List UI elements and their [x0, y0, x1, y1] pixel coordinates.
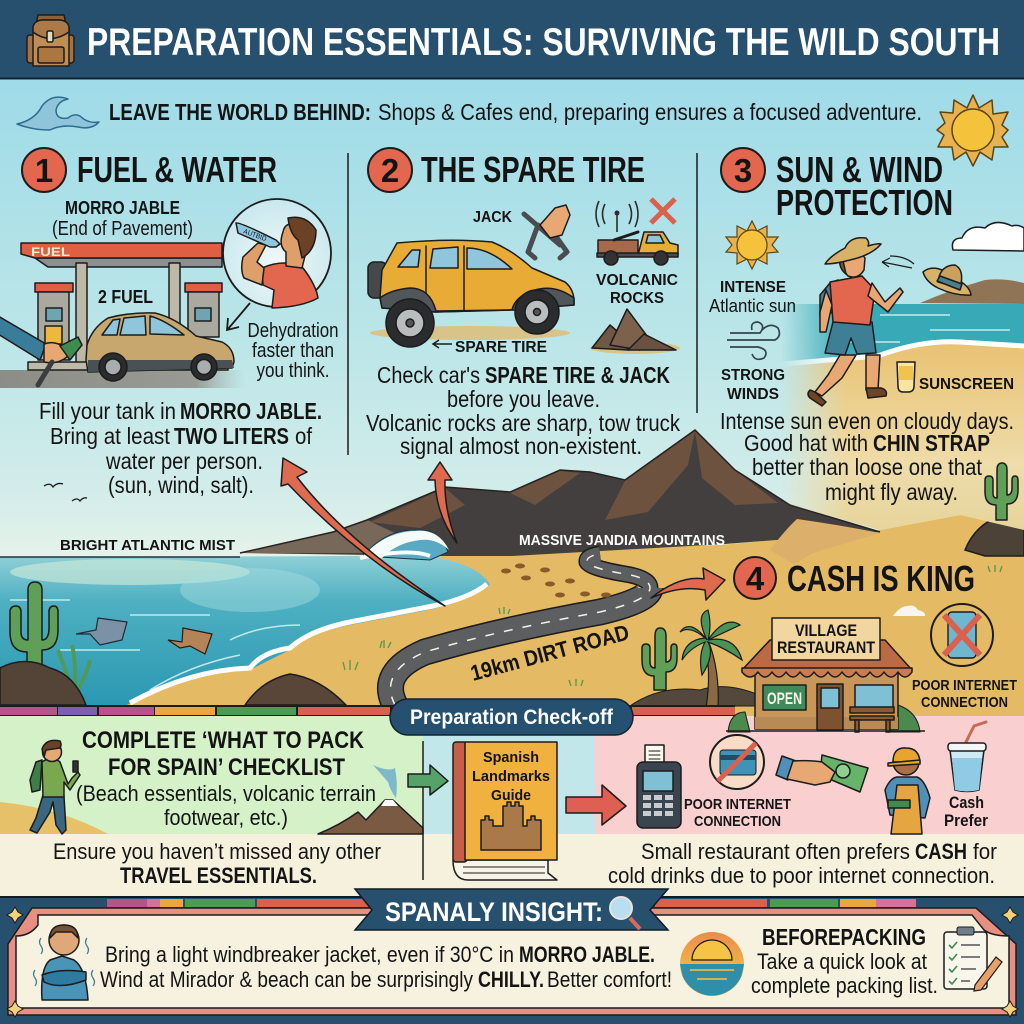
- intro text: Shops & Cafes end, preparing ensures a focused adventure.: [378, 99, 922, 125]
- checklist text: FOR SPAIN’ CHECKLIST: [108, 754, 345, 781]
- panel: 3 sun and wind protection: [700, 148, 1024, 530]
- before packing text: Take a quick look at: [757, 949, 927, 974]
- icon: small sun: [726, 221, 778, 269]
- heading 2: [368, 148, 645, 192]
- intro banner: [17, 97, 922, 130]
- intro text: LEAVE THE WORLD BEHIND:: [109, 99, 371, 125]
- body text 2: Volcanic rocks are sharp, tow truck: [366, 410, 680, 436]
- heading 1: 1: [35, 152, 53, 189]
- icon: wind: [727, 322, 779, 359]
- restaurant sign: [772, 618, 880, 660]
- salmon frame: [8, 908, 1016, 1015]
- horizon line: [0, 556, 240, 558]
- header bar: [0, 0, 1024, 80]
- heading 1: FUEL & WATER: [77, 149, 277, 190]
- poor internet label bottom: POOR INTERNET: [684, 796, 791, 813]
- morro jable label: (End of Pavement): [52, 218, 193, 240]
- sand ground: [0, 495, 1024, 720]
- flying hat: [923, 265, 971, 295]
- icon: no signal: [596, 199, 675, 232]
- heading 4: [734, 557, 975, 599]
- body text 1: Bring at least: [50, 423, 171, 449]
- shiver lines: [34, 938, 94, 986]
- before packing text: BEFOREPACKING: [762, 924, 926, 950]
- body text 1: TWO LITERS: [174, 423, 289, 449]
- intense sun label: [709, 279, 796, 316]
- palm tree: [680, 610, 742, 708]
- arrow to cash heading: [651, 568, 725, 600]
- crashing wave: [360, 530, 449, 560]
- divider strip: [0, 705, 735, 717]
- body text 3: might fly away.: [825, 479, 958, 505]
- spare tire label: SPARE TIRE: [455, 339, 547, 356]
- heading 2: 2: [381, 152, 399, 189]
- body text 1: MORRO JABLE.: [180, 398, 322, 424]
- sunscreen: [897, 362, 1014, 393]
- icon: cold drink: [948, 722, 986, 792]
- shore rock left: [0, 662, 86, 705]
- spanish landmarks guide book: Guide: [491, 787, 531, 804]
- icon: sunset over water: [680, 932, 744, 996]
- green arrow: [408, 765, 448, 795]
- green panel: [0, 716, 423, 834]
- icon: no internet phone: [931, 604, 993, 666]
- intro text: [109, 99, 922, 125]
- volcanic rocks label: ROCKS: [610, 290, 664, 307]
- panel: 4 cash is king: [651, 557, 975, 600]
- cash text: for: [973, 839, 997, 864]
- body text 2: Check car's: [377, 362, 480, 388]
- checklist band: [0, 716, 1024, 898]
- sun reflection and mist on the sea: [10, 559, 250, 585]
- spanish landmarks guide book: Spanish: [483, 749, 539, 766]
- gas station: 2 FUEL: [98, 287, 153, 307]
- body text 1: of: [295, 423, 313, 449]
- heading 3: PROTECTION: [776, 182, 953, 223]
- right rocks: [965, 516, 1024, 556]
- checklist text: [53, 727, 381, 888]
- checklist text: TRAVEL ESSENTIALS.: [120, 863, 317, 888]
- dark mound: [630, 687, 770, 706]
- sea ripples: [10, 600, 300, 690]
- cash text: [608, 839, 997, 888]
- manta ray grey: [76, 618, 127, 645]
- cactus roadside: [642, 628, 677, 690]
- spanish landmarks guide book: [453, 742, 557, 880]
- sand patch: [0, 802, 108, 834]
- strong winds label: [721, 367, 785, 403]
- volcanic rocks label: VOLCANIC: [596, 272, 678, 289]
- icon: tow truck: [597, 232, 678, 265]
- checklist text: footwear, etc.): [164, 805, 288, 830]
- beach scene background: [784, 304, 1024, 530]
- cash text: Small restaurant often prefers: [641, 839, 910, 864]
- poor internet label top: CONNECTION: [921, 694, 1008, 711]
- jandia mountains: [240, 430, 880, 556]
- dehydration note: [248, 320, 338, 382]
- intense sun label: INTENSE: [720, 279, 786, 296]
- atlantic sea: [0, 556, 490, 705]
- body text 3: [720, 408, 1014, 505]
- shoreline foam: [130, 584, 487, 703]
- poor internet label bottom: [684, 796, 791, 830]
- body text 1: water per person.: [105, 448, 263, 474]
- body text 2: signal almost non-existent.: [400, 433, 642, 459]
- icon: magnifier: [610, 897, 640, 929]
- mountains label: MASSIVE JANDIA MOUNTAINS: [519, 532, 725, 549]
- sky background: [0, 80, 1024, 560]
- icon: restaurant worker: [885, 748, 930, 834]
- grass tufts: [343, 565, 1002, 686]
- open sign: [763, 685, 806, 710]
- arrow to fuel panel: [281, 458, 445, 606]
- poor internet label top: [912, 677, 1017, 711]
- strong winds label: STRONG: [721, 367, 785, 384]
- hand holding nozzle: [0, 316, 82, 385]
- preparation check-off pill: [390, 699, 633, 735]
- preparation check-off pill: Preparation Check-off: [410, 706, 614, 729]
- panel: spanaly insight: [0, 889, 1024, 1024]
- sunscreen: SUNSCREEN: [919, 376, 1014, 393]
- colour strip: [107, 899, 916, 907]
- morro jable label: MORRO JABLE: [65, 198, 180, 218]
- icon: wave: [17, 97, 99, 130]
- before packing text: [751, 924, 938, 998]
- cash prefer label: Cash: [949, 793, 984, 812]
- manta ray brown: [168, 628, 212, 654]
- icon: volcanic rock pile: [590, 309, 680, 354]
- cream card: [16, 915, 1009, 1008]
- panel: 1 fuel and water: [0, 148, 338, 501]
- scene labels: [60, 532, 725, 686]
- cash text: CASH: [915, 839, 967, 864]
- red arrow: [566, 785, 626, 825]
- cloud: [952, 222, 1024, 251]
- checklist text: Ensure you haven’t missed any other: [53, 839, 381, 864]
- restaurant building: [726, 618, 925, 732]
- jack label: JACK: [473, 209, 512, 226]
- volcanic rocks label: [596, 272, 678, 307]
- body text 2: before you leave.: [447, 386, 600, 412]
- checklist text: COMPLETE ‘WHAT TO PACK: [82, 727, 365, 754]
- icon: big sun: [937, 95, 1008, 166]
- open sign: OPEN: [767, 689, 802, 708]
- cactus on shore: [10, 582, 58, 672]
- tan car: [86, 313, 234, 381]
- banner: [355, 889, 668, 930]
- door: [817, 684, 843, 730]
- cash prefer label: [944, 793, 988, 830]
- icon: person drinking water: [223, 199, 331, 308]
- dehydration note: Dehydration: [248, 320, 338, 342]
- heading 1: [22, 148, 277, 192]
- icon: chilly man: [42, 925, 88, 1000]
- far hill: [920, 279, 1024, 304]
- atlantic mist label: BRIGHT ATLANTIC MIST: [60, 537, 235, 554]
- seaweed plant: [55, 645, 90, 690]
- divider lines: [348, 153, 697, 455]
- icon: castle: [481, 802, 541, 850]
- winding dirt road: [390, 554, 650, 705]
- body text 1: (sun, wind, salt).: [108, 472, 254, 498]
- divider line check-off: [422, 741, 424, 880]
- dehydration arrow: [227, 303, 250, 330]
- before packing text: complete packing list.: [751, 973, 938, 998]
- icon: payment terminal: [637, 745, 681, 828]
- morro jable label: [52, 198, 193, 240]
- icon: volcano with smoke: [318, 765, 423, 834]
- dirt road label: 19km DIRT ROAD: [468, 619, 632, 686]
- panel: 2 spare tire: [366, 148, 680, 459]
- icon: jack with hand: [524, 205, 570, 258]
- icon: birds: [44, 483, 87, 501]
- hiker with phone: [30, 740, 80, 834]
- heading 2: THE SPARE TIRE: [421, 149, 645, 190]
- body text 2: [366, 362, 680, 459]
- insight text: MORRO JABLE.: [519, 942, 655, 967]
- icon: backpack: [27, 15, 74, 66]
- hiker with chin strap hat: [808, 238, 903, 406]
- intense sun label: Atlantic sun: [709, 296, 796, 316]
- banner: SPANALY INSIGHT:: [385, 897, 603, 927]
- small cloud: [893, 606, 925, 616]
- body text 3: better than loose one that: [752, 454, 983, 480]
- gas station: FUEL: [31, 245, 70, 259]
- heading 3: SUN & WIND: [776, 149, 943, 190]
- dune: [770, 519, 880, 565]
- hat motion arrow: [882, 256, 914, 268]
- cash text: cold drinks due to poor internet connection.: [608, 863, 995, 888]
- body text 3: Good hat with: [744, 430, 868, 456]
- icon: person drinking water: AUTBID: [242, 228, 267, 243]
- cash prefer label: Prefer: [944, 811, 988, 830]
- icon: clipboard: [944, 927, 1002, 991]
- insight text: Better comfort!: [547, 967, 672, 992]
- yellow suv: [368, 240, 574, 347]
- bench: [850, 707, 894, 732]
- restaurant sign: VILLAGE: [795, 621, 857, 640]
- window: [855, 685, 893, 711]
- right cactus: [985, 463, 1018, 520]
- insight text: [100, 942, 672, 992]
- footprints: [501, 564, 611, 598]
- icon: hand with cash: [776, 755, 868, 792]
- landscape scene: [0, 430, 1024, 720]
- body text 2: SPARE TIRE & JACK: [485, 362, 670, 388]
- insight text: Wind at Mirador & beach can be surprisingly: [100, 967, 473, 992]
- gas station: [0, 243, 245, 388]
- strong winds label: WINDS: [727, 386, 779, 403]
- insight text: Bring a light windbreaker jacket, even if 30°C in: [105, 942, 514, 967]
- body text 1: [39, 398, 322, 498]
- icon: no card: [710, 735, 764, 789]
- insight text: CHILLY.: [478, 967, 544, 992]
- heading 3: [721, 148, 953, 223]
- stars: [7, 907, 1018, 1017]
- checklist text: (Beach essentials, volcanic terrain: [76, 781, 376, 806]
- body text 1: Fill your tank in: [39, 398, 176, 424]
- restaurant sign: RESTAURANT: [777, 638, 876, 657]
- heading 3: 3: [734, 152, 752, 189]
- spanish landmarks guide book: Landmarks: [472, 768, 550, 785]
- cream panel: [0, 834, 1024, 898]
- poor internet label bottom: CONNECTION: [694, 813, 781, 830]
- dehydration note: you think.: [256, 360, 330, 382]
- pink panel: [595, 716, 1024, 834]
- heading 4: 4: [746, 560, 765, 597]
- body text 3: CHIN STRAP: [873, 430, 990, 456]
- arrow to spare tire panel: [428, 462, 457, 543]
- shore rock centre: [245, 674, 346, 705]
- blue book panel: [423, 716, 595, 834]
- dehydration note: faster than: [252, 340, 334, 362]
